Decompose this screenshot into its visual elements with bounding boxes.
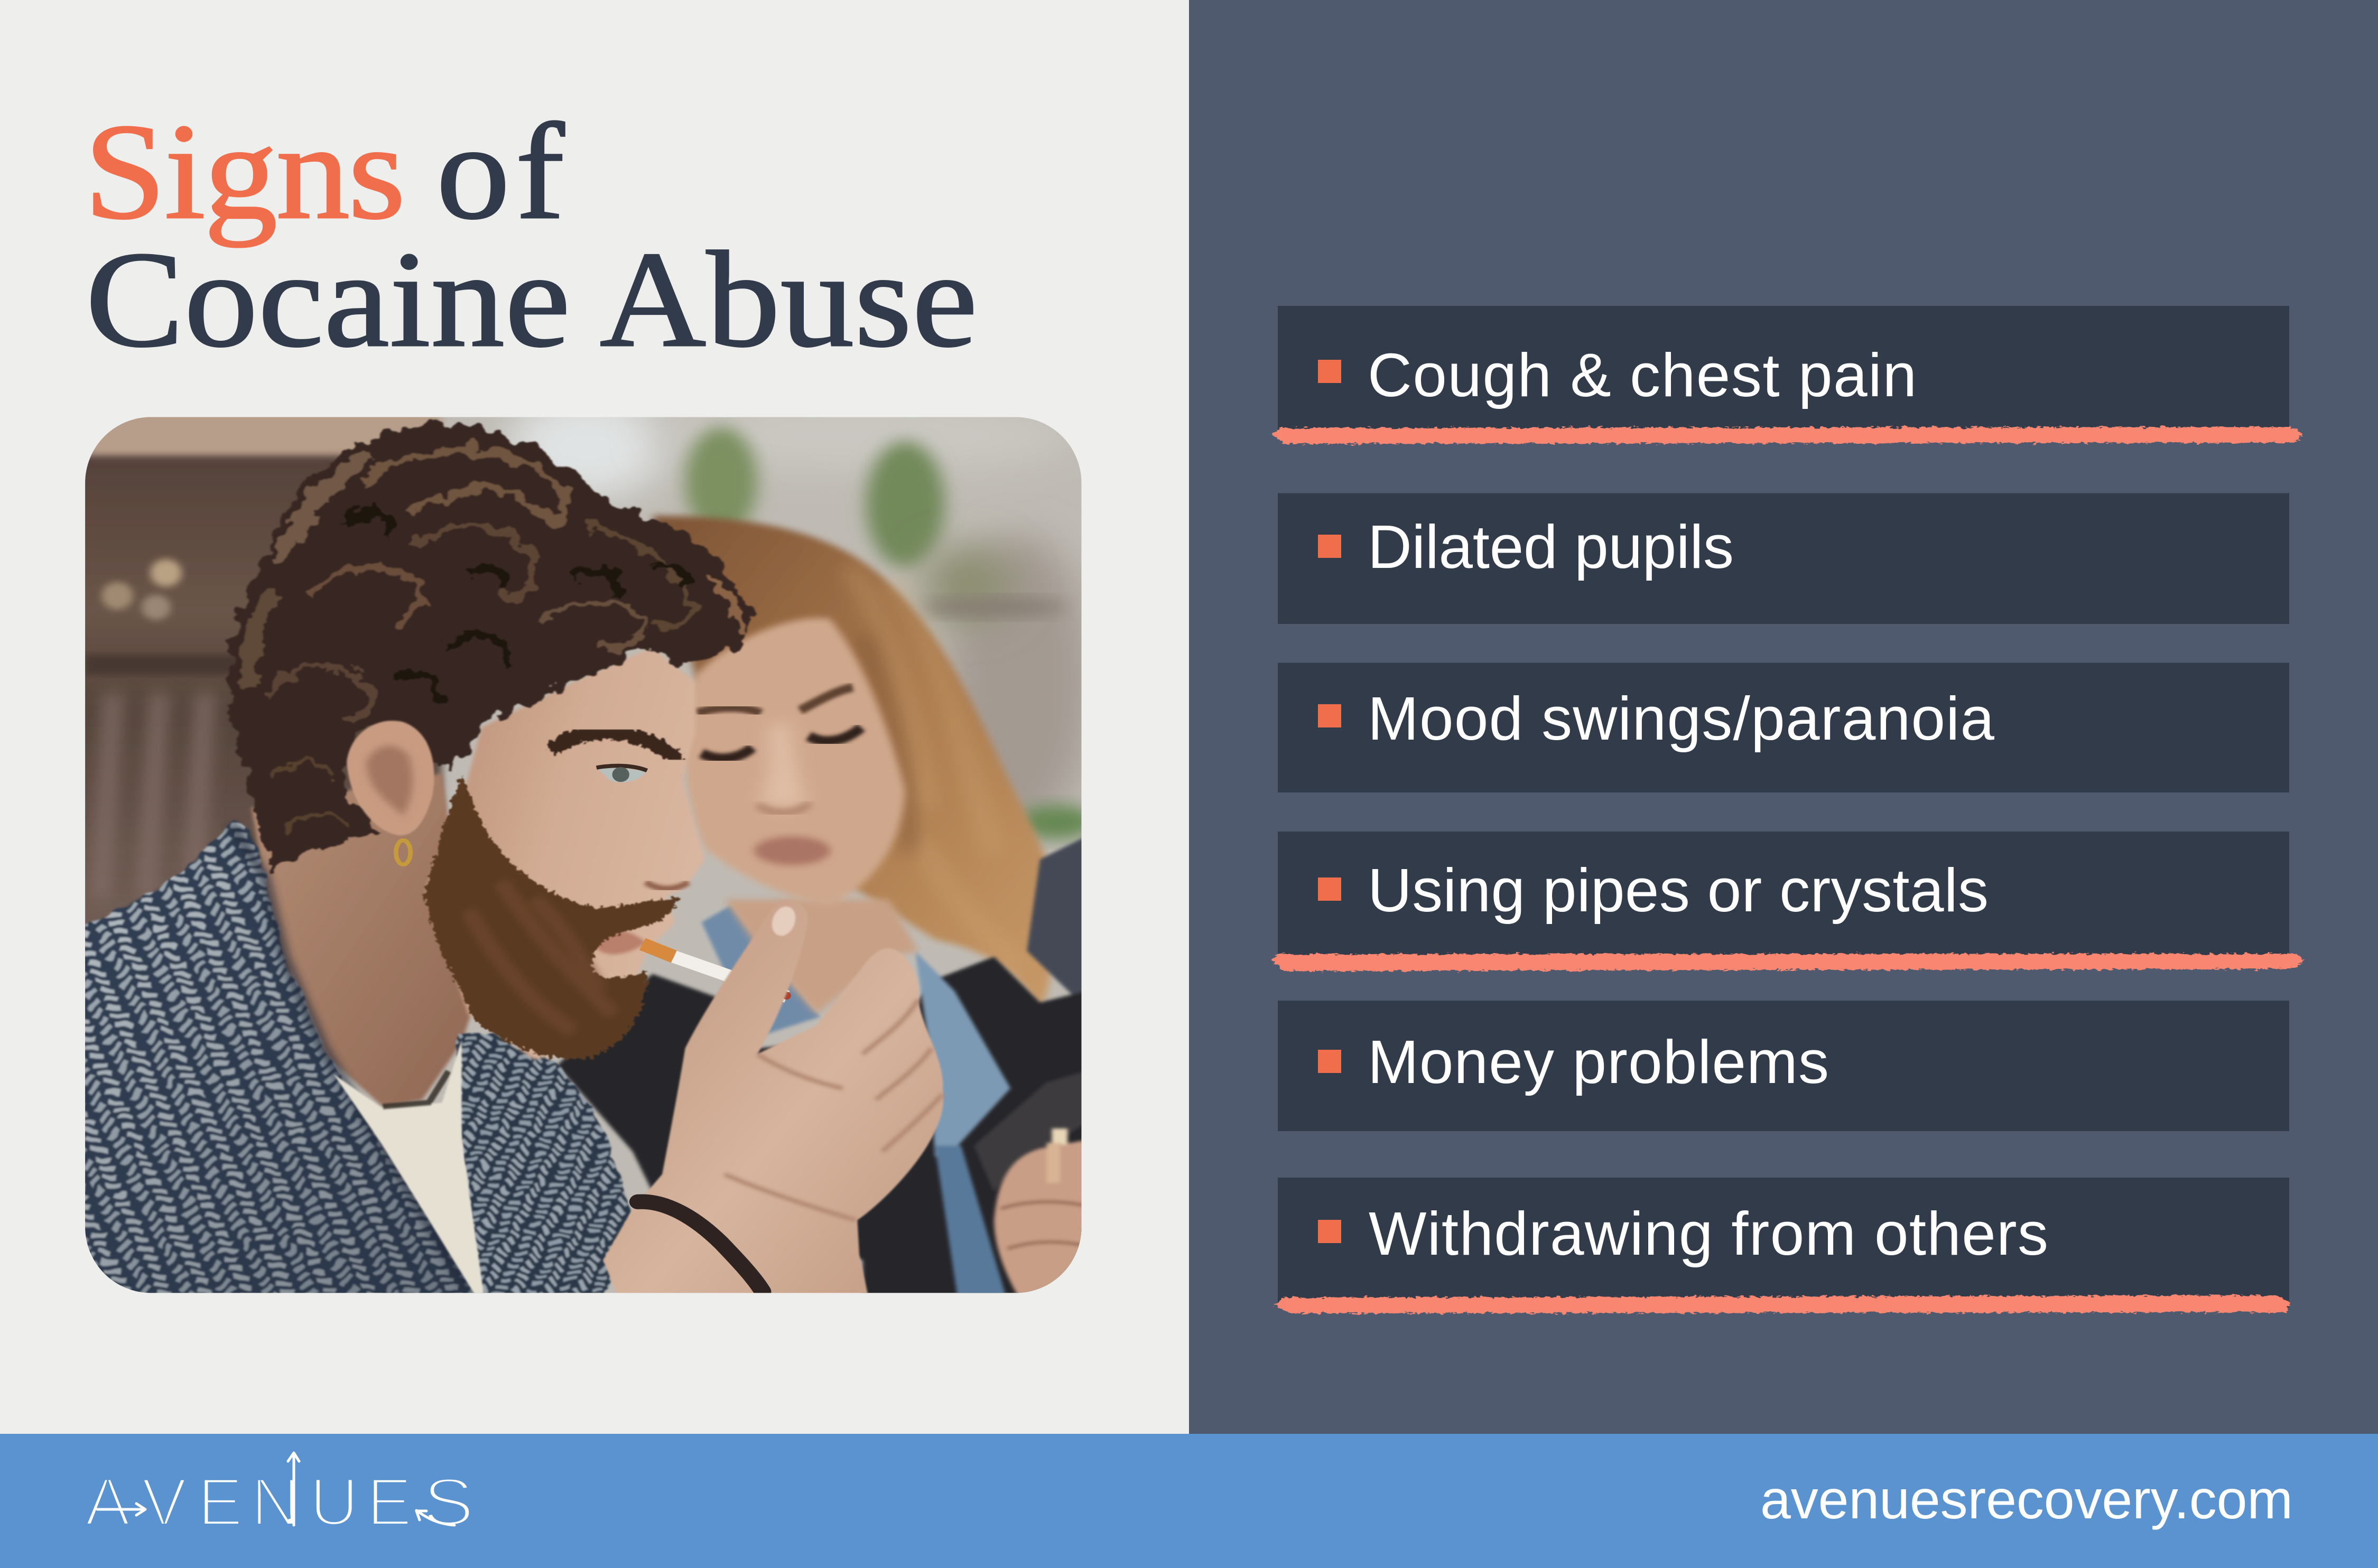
- bullet: [1318, 704, 1341, 727]
- title: [84, 96, 978, 376]
- brush underline: [1271, 954, 2304, 971]
- logo lettering: A: [85, 1464, 131, 1540]
- bullet: [1318, 878, 1341, 901]
- logo lettering: N: [251, 1464, 300, 1540]
- title: of: [436, 96, 570, 248]
- man's eyebrow and eye: [557, 732, 675, 782]
- logo lettering: U: [310, 1464, 358, 1540]
- website url: avenuesrecovery.com: [1760, 1469, 2293, 1530]
- brush underline: [1271, 427, 2303, 444]
- photo: man lighting a cigarette with woman beside him: [85, 417, 1081, 1293]
- label: Money problems: [1368, 1028, 1829, 1096]
- label: Dilated pupils: [1368, 512, 1734, 581]
- title: Cocaine Abuse: [86, 223, 978, 376]
- label: Using pipes or crystals: [1368, 856, 1989, 925]
- logo lettering: E: [367, 1464, 412, 1540]
- bullet: [1318, 535, 1341, 558]
- bullet: [1318, 360, 1341, 383]
- man's beard: [425, 773, 679, 1059]
- list item: Money problems: [1278, 1001, 2289, 1131]
- brush underline: [1274, 1295, 2290, 1313]
- list item: Mood swings/paranoia: [1278, 662, 2289, 792]
- list item: Withdrawing from others: [1274, 1178, 2290, 1313]
- man's ear: [347, 721, 434, 835]
- woman's hair: [652, 516, 1057, 1008]
- footer band: [0, 1434, 2378, 1568]
- list item: Using pipes or crystals: [1271, 832, 2304, 971]
- list item: Cough & chest pain: [1271, 306, 2303, 444]
- man's nose shadow: [646, 882, 689, 889]
- cigarette: [643, 944, 791, 1000]
- man's coat: [80, 822, 633, 1300]
- logo lettering: S: [423, 1464, 474, 1540]
- bullet: [1318, 1050, 1341, 1073]
- bracelet: [638, 1202, 763, 1292]
- list item: Dilated pupils: [1278, 493, 2289, 624]
- logo lettering: E: [198, 1464, 243, 1540]
- panel: left background: [0, 0, 1189, 1434]
- woman's hand: [994, 1128, 1086, 1300]
- title: Signs: [84, 96, 404, 248]
- man's lips: [597, 930, 646, 954]
- man's earring: [396, 841, 411, 864]
- woman's face: [684, 618, 905, 905]
- man's hair: [230, 424, 751, 871]
- man's hand: [603, 899, 943, 1300]
- woman's denim shirt: [702, 905, 1010, 1300]
- photo background: [74, 395, 1104, 1305]
- logo arrow: up through N: [288, 1453, 299, 1525]
- logo arrow: curl on S: [416, 1510, 454, 1525]
- man's neck: [252, 773, 475, 1107]
- logo: Avenues: [85, 1453, 474, 1540]
- logo lettering: [85, 1464, 474, 1540]
- man's beard highlights: [468, 882, 613, 1031]
- woman's jacket and shoulder: [557, 836, 1086, 1300]
- bullet: [1318, 1220, 1341, 1243]
- man's face: [425, 647, 705, 1060]
- label: Mood swings/paranoia: [1368, 684, 1994, 753]
- logo arrow: horizontal through A: [97, 1504, 145, 1515]
- label: Cough & chest pain: [1368, 341, 1917, 409]
- logo lettering: V: [142, 1464, 187, 1540]
- woman's neck: [724, 899, 918, 1014]
- panel: right background: [1189, 0, 2378, 1434]
- man's white shirt: [333, 1040, 485, 1300]
- label: Withdrawing from others: [1369, 1199, 2048, 1268]
